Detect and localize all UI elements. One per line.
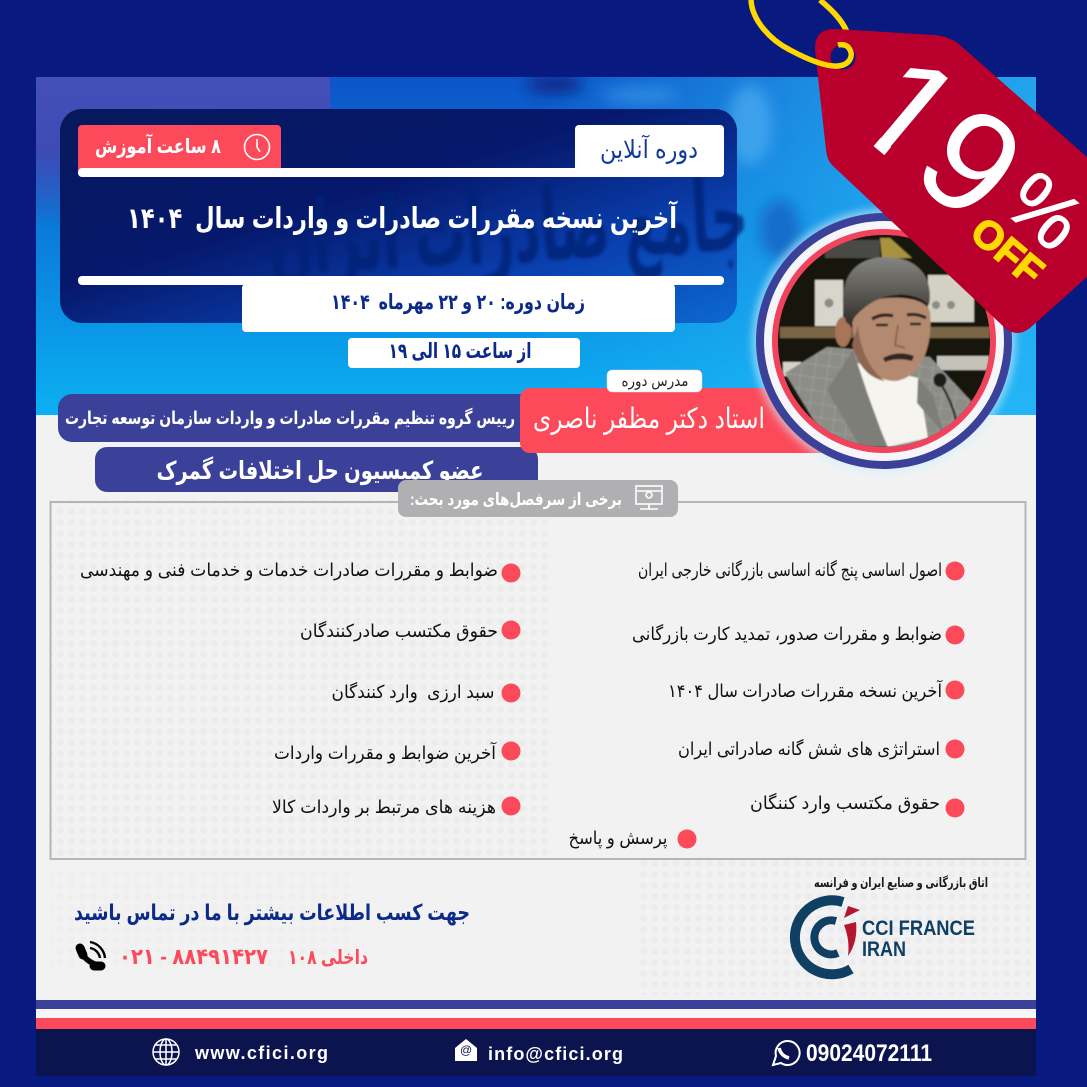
topic 3: آخرین نسخه مقررات صادرات سال ۱۴۰۴ (668, 679, 943, 702)
icon: envelope (455, 1039, 477, 1061)
panel: dark header (60, 109, 737, 323)
email (455, 1039, 623, 1064)
off label: OFF (962, 209, 1052, 294)
header rule bottom (78, 276, 724, 285)
role bar 2 (95, 447, 538, 492)
title: آخرین نسخه مقررات صادرات و واردات سال ۱۴۰۴ (127, 200, 678, 235)
topic 4: استراتژی های شش گانه صادراتی ایران (678, 738, 940, 760)
topic 10: هزینه های مرتبط بر واردات کالا (272, 797, 496, 818)
instructor label: مدرس دوره (622, 373, 688, 390)
panel: main card (36, 77, 1036, 1002)
icon: presentation screen (636, 486, 662, 509)
topics label: برخی از سرفصل‌های مورد بحث: (410, 490, 622, 510)
header rule top (78, 168, 724, 177)
date box (242, 284, 675, 332)
topic 6: ضوابط و مقررات صادرات خدمات و خدمات فنی و مهندسی (80, 560, 498, 581)
topic 7: حقوق مکتسب صادرکنندگان (300, 620, 498, 642)
icon: whatsapp (773, 1041, 800, 1065)
topics: right column (568, 559, 964, 849)
tag string back (820, 0, 847, 32)
topic 2: ضوابط و مقررات صدور، تمدید کارت بازرگانی (632, 623, 942, 645)
duration tag: ۸ ساعت آموزش (95, 133, 221, 158)
instructor label (607, 370, 702, 392)
contact phone: ۰۲۱ - ۸۸۴۹۱۴۲۷ (119, 944, 269, 969)
instructor name bar (520, 388, 840, 453)
role bar 1: رییس گروه تنظیم مقررات صادرات و واردات سازمان توسعه تجارت (65, 407, 515, 429)
topics label (398, 480, 678, 517)
tag body (815, 29, 1087, 333)
logo: CCI France Iran: IRAN (862, 938, 906, 961)
topic 11: پرسش و پاسخ (568, 828, 668, 849)
topic 5: حقوق مکتسب وارد کننگان (750, 792, 940, 814)
footer stripes (36, 1000, 1036, 1029)
instructor name bar: استاد دکتر مظفر ناصری (533, 403, 765, 435)
logo: CCI France Iran: CCI FRANCE (862, 917, 975, 940)
email: info@cfici.org (488, 1044, 623, 1064)
background texture (527, 74, 800, 260)
contact phone: داخلی ۱۰۸ (288, 947, 368, 969)
topics: left column (80, 560, 520, 818)
date box: زمان دوره: ۲۰ و ۲۲ مهرماه ۱۴۰۴ (331, 291, 585, 314)
price tag (751, 0, 1087, 333)
portrait ring (752, 209, 1016, 473)
discount number base mask (841, 111, 915, 177)
topic 1: اصول اساسی پنج گانه اساسی بازرگانی خارجی ایران (638, 559, 942, 581)
topic 8: سبد ارزی وارد کنندگان (332, 681, 494, 703)
panel: topics frame (50, 502, 1026, 859)
icon: envelope: @ (460, 1043, 472, 1057)
website (153, 1039, 328, 1065)
icon: globe (153, 1039, 179, 1065)
time box: از ساعت ۱۵ الی ۱۹ (388, 340, 532, 363)
portrait photo (778, 235, 990, 447)
whatsapp: 09024072111 (806, 1040, 932, 1067)
online course tab (575, 125, 724, 177)
duration tag (78, 125, 281, 173)
footer bar (36, 1029, 1036, 1076)
logo: CCI France Iran (795, 875, 988, 974)
clock icon (244, 134, 270, 160)
tag string front (751, 0, 851, 66)
time box (348, 338, 580, 368)
topic 9: آخرین ضوابط و مقررات واردات (274, 741, 497, 764)
contact phone (80, 942, 368, 969)
online course tab: دوره آنلاین (600, 134, 698, 165)
role bar 2: عضو کمیسیون حل اختلافات گمرک (156, 456, 484, 486)
website: www.cfici.org (194, 1043, 328, 1063)
logo: CCI France Iran: اتاق بازرگانی و صنایع ایران و فرانسه (814, 875, 988, 890)
tag hole (830, 44, 856, 70)
icon: phone (80, 942, 105, 966)
discount number: 19 (826, 23, 1054, 250)
role bar 1 (58, 394, 538, 442)
contact heading: جهت کسب اطلاعات بیشتر با ما در تماس باشید (74, 900, 470, 926)
